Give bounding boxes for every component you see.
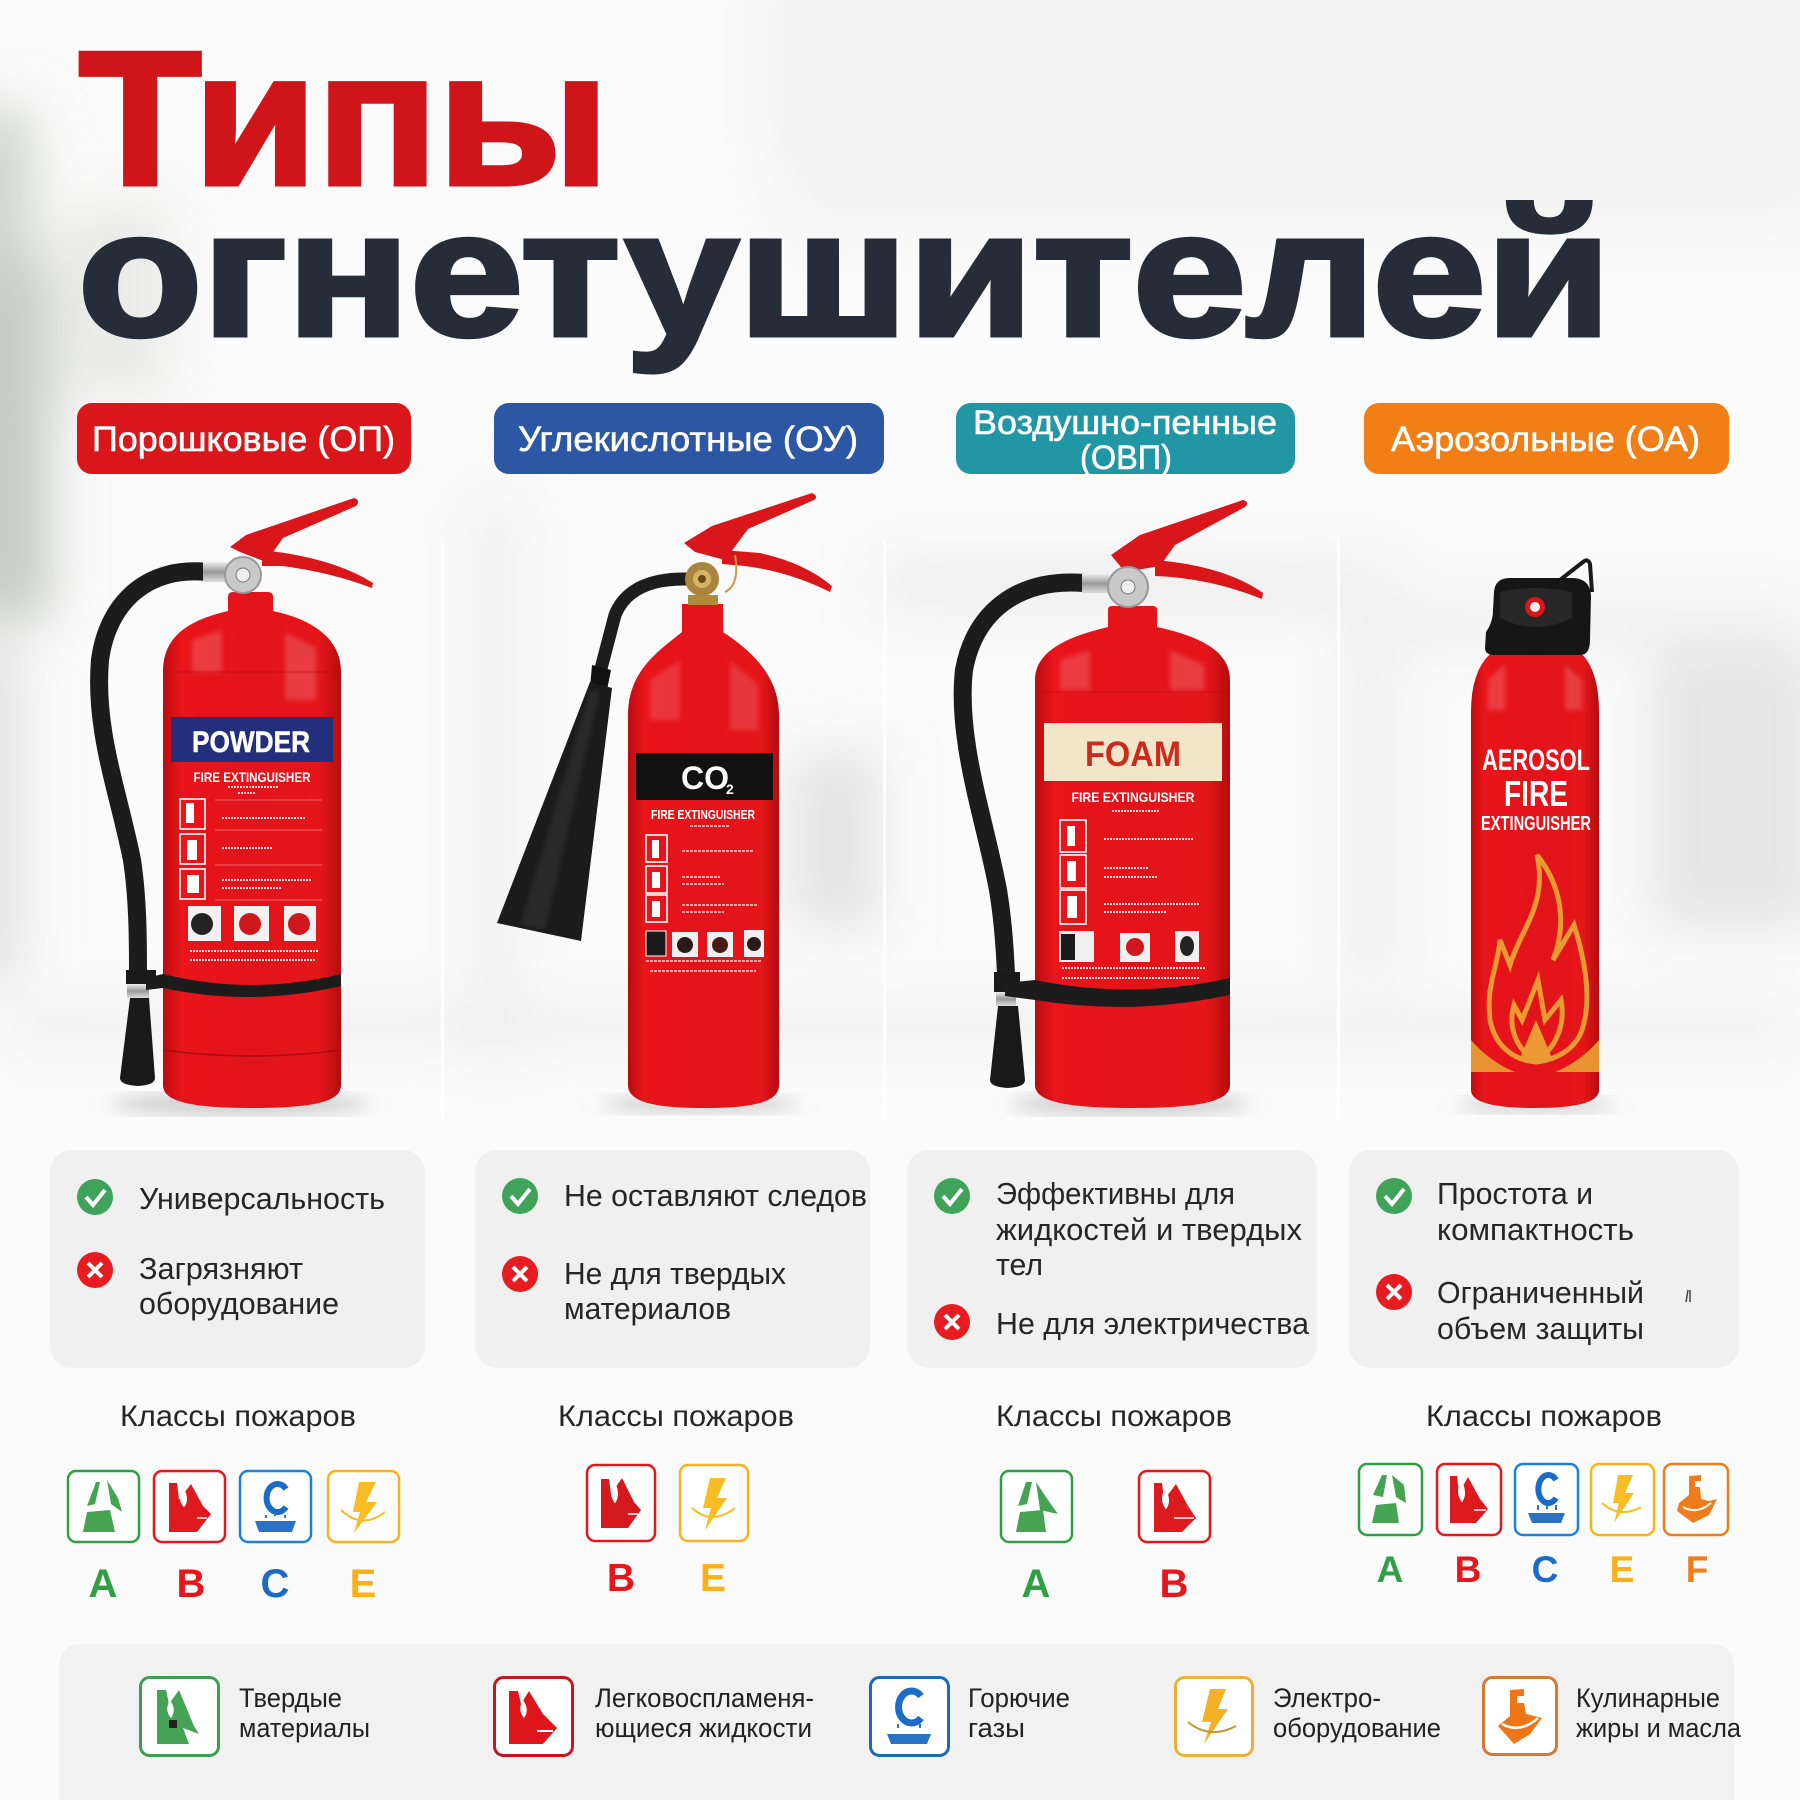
icon: cross bbox=[77, 1252, 113, 1288]
panel: foam pros and cons: Эффективны для bbox=[996, 1176, 1235, 1211]
letters: aerosol classes bbox=[1377, 1549, 1708, 1590]
icon: class E bbox=[1591, 1464, 1654, 1535]
letters: carbon dioxide classes bbox=[607, 1557, 726, 1600]
label band bbox=[1044, 723, 1222, 781]
legend: electrical equipment: Электро- bbox=[1273, 1683, 1381, 1713]
icon: class A bbox=[68, 1471, 139, 1542]
extinguisher: carbon dioxide: CO bbox=[681, 760, 729, 796]
icon: class A bbox=[1001, 1471, 1072, 1542]
icon: cross bbox=[934, 1304, 970, 1340]
panel: powder pros and cons: Загрязняют bbox=[139, 1251, 303, 1286]
letters: powder classes: A bbox=[89, 1562, 117, 1606]
panel: foam pros and cons: тел bbox=[996, 1247, 1043, 1282]
icon: class E bbox=[328, 1471, 399, 1542]
pill: foam bbox=[956, 403, 1295, 477]
panel: carbon dioxide pros and cons: Не оставляют следов bbox=[564, 1178, 867, 1213]
title line 2: огнетушителей bbox=[78, 174, 1611, 373]
panel: class legend bbox=[59, 1644, 1742, 1800]
letters: aerosol classes: F bbox=[1686, 1549, 1708, 1590]
label band bbox=[171, 717, 333, 762]
letters: powder classes: E bbox=[350, 1562, 376, 1606]
panel: foam pros and cons: жидкостей и твердых bbox=[996, 1212, 1302, 1247]
icon: class B bbox=[587, 1465, 655, 1541]
letters: foam classes bbox=[1022, 1562, 1188, 1606]
heading: fire classes, aerosol: Классы пожаров bbox=[1426, 1400, 1662, 1433]
icon: class E bbox=[680, 1465, 748, 1541]
legend: flammable liquids: ющиеся жидкости bbox=[595, 1713, 812, 1743]
legend: combustible gases: газы bbox=[968, 1713, 1025, 1743]
extinguisher: carbon dioxide: FIRE EXTINGUISHER bbox=[651, 807, 755, 822]
letters: aerosol classes: E bbox=[1610, 1549, 1634, 1590]
letters: foam classes: A bbox=[1022, 1562, 1050, 1606]
title line 1: Типы bbox=[79, 13, 609, 225]
icon: class C bbox=[1515, 1464, 1578, 1535]
letters: carbon dioxide classes: B bbox=[607, 1557, 635, 1600]
extinguisher: powder bbox=[99, 498, 373, 1112]
icon: check bbox=[77, 1179, 113, 1215]
icon: class B bbox=[1139, 1471, 1210, 1542]
letters: powder classes: C bbox=[261, 1562, 289, 1606]
panel: aerosol pros and cons: объем защиты bbox=[1437, 1311, 1644, 1346]
legend: cooking fats: жиры и масла bbox=[1576, 1713, 1742, 1743]
legend: solid materials bbox=[140, 1678, 370, 1756]
icon: check bbox=[934, 1178, 970, 1214]
extinguisher: carbon dioxide bbox=[497, 493, 832, 1111]
pill: carbon dioxide: Углекислотные (ОУ) bbox=[518, 420, 858, 459]
letters: aerosol classes: A bbox=[1377, 1549, 1403, 1590]
icon: class C bbox=[240, 1471, 311, 1542]
legend: electrical equipment: оборудование bbox=[1273, 1713, 1441, 1743]
extinguisher: powder: FIRE EXTINGUISHER bbox=[194, 769, 310, 785]
icon: check bbox=[1376, 1178, 1412, 1214]
pill: powder: Порошковые (ОП) bbox=[92, 420, 395, 459]
pill: foam: (ОВП) bbox=[1080, 439, 1172, 477]
flame artwork bbox=[1489, 855, 1587, 1062]
pill: aerosol: Аэрозольные (ОА) bbox=[1391, 420, 1700, 459]
icon row: carbon dioxide classes bbox=[587, 1465, 748, 1541]
pill: aerosol bbox=[1364, 403, 1729, 474]
legend: flammable liquids bbox=[494, 1678, 814, 1756]
panel: aerosol pros and cons: Ограниченный bbox=[1437, 1275, 1644, 1310]
legend: flammable liquids: Легковоспламеня- bbox=[595, 1683, 814, 1713]
pill: powder bbox=[77, 403, 411, 474]
icon: cross bbox=[502, 1256, 538, 1292]
panel: foam pros and cons: Не для электричества bbox=[996, 1306, 1310, 1341]
icon: class A bbox=[1359, 1464, 1422, 1535]
legend: cooking fats bbox=[1484, 1678, 1742, 1754]
panel: aerosol pros and cons: Простота и bbox=[1437, 1176, 1593, 1211]
panel: aerosol pros and cons: компактность bbox=[1437, 1212, 1634, 1247]
pill: carbon dioxide bbox=[494, 403, 884, 474]
extinguisher: aerosol: FIRE bbox=[1504, 773, 1568, 814]
letters: carbon dioxide classes: E bbox=[700, 1557, 726, 1600]
extinguisher: aerosol bbox=[1456, 560, 1616, 1111]
legend: combustible gases bbox=[870, 1678, 1070, 1756]
extinguisher: carbon dioxide: 2 bbox=[726, 781, 734, 797]
panel: carbon dioxide pros and cons: материалов bbox=[564, 1291, 731, 1326]
icon row: foam classes bbox=[1001, 1471, 1210, 1542]
heading: fire classes, powder: Классы пожаров bbox=[120, 1400, 356, 1433]
letters: aerosol classes: B bbox=[1455, 1549, 1481, 1590]
letters: foam classes: B bbox=[1160, 1562, 1188, 1606]
panel: aerosol pros and cons bbox=[1349, 1150, 1739, 1368]
panel: carbon dioxide pros and cons bbox=[475, 1150, 870, 1368]
heading: fire classes, foam: Классы пожаров bbox=[996, 1400, 1232, 1433]
legend: solid materials: материалы bbox=[239, 1713, 370, 1743]
extinguisher: aerosol: AEROSOL bbox=[1482, 744, 1590, 777]
icon: cross bbox=[1376, 1274, 1412, 1310]
panel: powder pros and cons: оборудование bbox=[139, 1286, 339, 1321]
letters: powder classes: B bbox=[177, 1562, 205, 1606]
icon: class B bbox=[154, 1471, 225, 1542]
icon: class B bbox=[1437, 1464, 1501, 1535]
panel: carbon dioxide pros and cons: Не для твердых bbox=[564, 1256, 786, 1291]
legend: cooking fats: Кулинарные bbox=[1576, 1683, 1720, 1713]
letters: aerosol classes: C bbox=[1532, 1549, 1558, 1590]
icon: check bbox=[502, 1178, 538, 1214]
pill: foam: Воздушно-пенные bbox=[973, 404, 1277, 442]
icon row: aerosol classes bbox=[1359, 1464, 1728, 1535]
extinguisher: foam bbox=[963, 500, 1263, 1112]
panel: foam pros and cons bbox=[907, 1150, 1317, 1368]
legend: electrical equipment bbox=[1176, 1678, 1441, 1756]
title bbox=[78, 13, 1611, 373]
legend: solid materials: Твердые bbox=[239, 1683, 342, 1713]
panel: powder pros and cons: Универсальность bbox=[139, 1181, 385, 1216]
extinguisher: foam: FIRE EXTINGUISHER bbox=[1072, 789, 1194, 805]
panel: powder pros and cons bbox=[50, 1150, 425, 1368]
extinguisher: foam: FOAM bbox=[1085, 735, 1181, 774]
icon row: powder classes bbox=[68, 1471, 399, 1542]
letters: powder classes bbox=[89, 1562, 376, 1606]
extinguisher: aerosol: EXTINGUISHER bbox=[1481, 813, 1591, 835]
label band bbox=[636, 753, 773, 800]
legend: combustible gases: Горючие bbox=[968, 1683, 1070, 1713]
extinguisher: powder: POWDER bbox=[192, 726, 310, 759]
heading: fire classes, carbon dioxide: Классы пожаров bbox=[558, 1400, 794, 1433]
icon: class F bbox=[1664, 1464, 1728, 1535]
